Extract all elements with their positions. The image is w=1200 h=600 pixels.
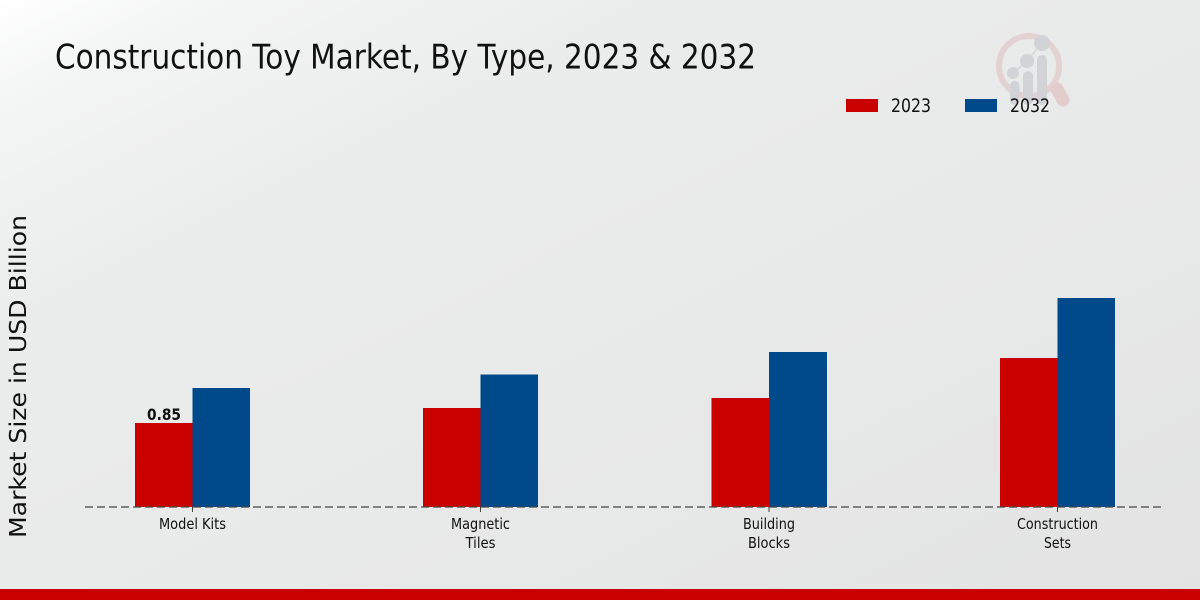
y axis label: Market Size in USD Billion [6, 215, 32, 538]
legend item: 2032 [965, 95, 1050, 117]
category label: Construction Sets: Construction [1017, 515, 1098, 533]
legend item: 2032: 2032 [1010, 95, 1050, 117]
category label: Building Blocks: Blocks [748, 534, 790, 552]
bars: Model Kits [135, 388, 250, 507]
bars: Magnetic Tiles [423, 374, 538, 507]
legend item: 2023 [846, 95, 931, 117]
icon: watermark logo [999, 35, 1063, 105]
data label: 0.85: 0.85 [147, 405, 181, 424]
category label: Magnetic Tiles: Tiles [465, 534, 496, 552]
bar chart [85, 298, 1165, 512]
bars: Construction Sets [1000, 298, 1115, 507]
category label: Construction Sets [1017, 515, 1098, 552]
legend item: 2023: 2023 [891, 95, 931, 117]
title: Construction Toy Market, By Type, 2023 & 2032 [55, 38, 756, 78]
category label: Magnetic Tiles: Magnetic [451, 515, 510, 533]
category label: Magnetic Tiles [451, 515, 510, 552]
footer bar [0, 589, 1200, 600]
category label: Building Blocks [743, 515, 795, 552]
legend [846, 95, 1050, 117]
category label: Building Blocks: Building [743, 515, 795, 533]
category label: Construction Sets: Sets [1044, 534, 1071, 552]
category label: Model Kits: Model Kits [159, 515, 226, 533]
bars: Building Blocks [712, 352, 827, 507]
